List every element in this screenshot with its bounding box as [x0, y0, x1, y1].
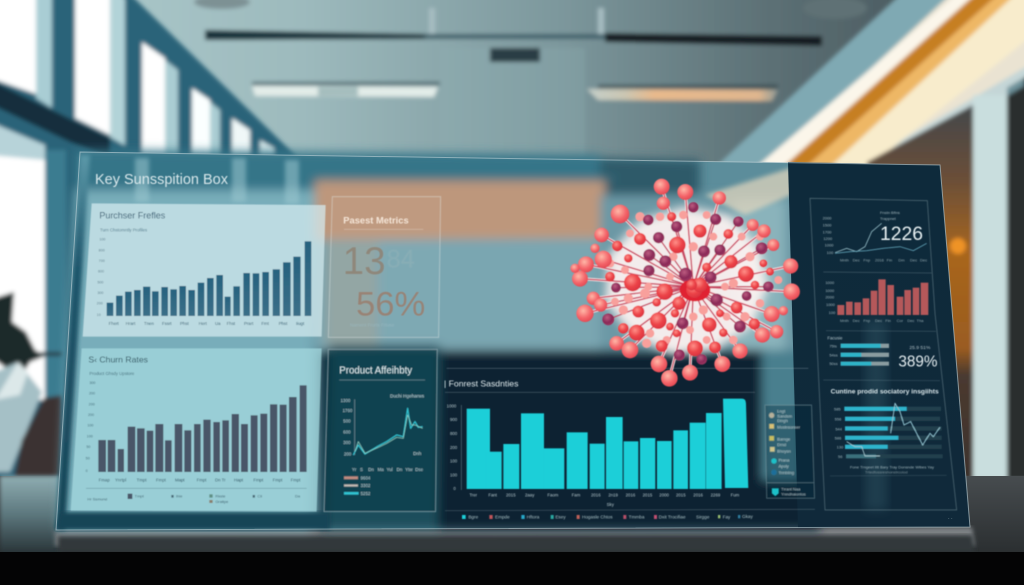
main title: Key Sunsspition Box	[95, 172, 229, 188]
chart legend: 3302	[361, 483, 371, 488]
x axis labels: Ytw	[405, 467, 413, 472]
metric: 56%: 56%	[356, 286, 425, 324]
y axis labels: 50	[86, 445, 90, 449]
mini chart: customer insights bars and line	[831, 389, 943, 474]
x axis labels: Sky	[607, 502, 615, 507]
mini chart: line with 1226: 1226	[880, 224, 923, 245]
x axis labels: Prart	[244, 321, 254, 326]
x axis labels: 2016	[693, 493, 704, 498]
x axis labels: 2015	[676, 493, 686, 498]
panel: product affinity line chart	[324, 349, 437, 512]
bottom legend: Empde	[495, 515, 510, 520]
y axis labels: 200	[89, 402, 95, 406]
metric: faint 84: 84	[387, 245, 415, 273]
x axis labels: Iiugt	[296, 321, 305, 326]
panel: right column of mini charts	[810, 198, 957, 510]
y axis labels: 600	[343, 429, 351, 434]
mini chart: progress bars with 389%: 54ss	[829, 352, 838, 357]
y axis labels	[447, 403, 458, 491]
mini chart: line with 1226: 1700	[823, 229, 832, 234]
left window wall	[0, 0, 300, 480]
bottom legend: Fay	[723, 515, 731, 520]
mini chart: red bars: Dec	[853, 318, 860, 323]
x axis labels: 2015	[506, 493, 516, 498]
mini chart: customer insights bars and line: 130	[837, 445, 844, 450]
y axis labels: 0	[453, 486, 456, 491]
mini chart: red bars: Tha	[917, 318, 924, 323]
y axis labels: 700	[99, 259, 105, 263]
right wall with light strip and doorway	[680, 0, 1024, 520]
line series	[353, 408, 423, 455]
inner purple spheres	[602, 202, 774, 365]
x axis labels: Phst	[279, 321, 288, 326]
x axis labels: Yul	[387, 467, 393, 472]
x axis labels: Fmpt	[253, 477, 264, 482]
x axis labels	[352, 467, 424, 472]
mini chart: line with 1226: 100	[827, 250, 834, 255]
bottom legend: Tmmba	[629, 515, 645, 520]
bottom legend	[462, 514, 754, 520]
bottom legend: Hftora	[527, 515, 540, 520]
panel: purchase profiles bar chart	[83, 203, 326, 337]
mini chart: progress bars with 389%: Facusie	[827, 335, 843, 340]
mini chart: progress bars with 389%: 75ts	[829, 344, 837, 349]
mini chart: customer insights bars and line: 556	[835, 417, 842, 422]
lower band	[56, 512, 330, 530]
mini chart: red bars: 1000	[825, 280, 835, 285]
x axis labels	[469, 493, 740, 507]
x axis labels: Dse	[415, 467, 424, 472]
bottom legend: Gkay	[742, 514, 754, 519]
mini chart: line with 1226: Fnstn Bflns	[880, 210, 900, 215]
y axis labels	[97, 238, 105, 317]
x axis labels: Ma	[378, 467, 384, 472]
x axis labels: Faom	[547, 493, 559, 498]
mini chart: red bars: 2000	[825, 295, 835, 300]
x axis labels: Frnt	[261, 321, 270, 326]
chart legend: 9604	[361, 475, 371, 480]
side legend box: Trrant Naa	[781, 487, 801, 492]
chart legend: Gratipe	[215, 499, 229, 504]
side legend box: Lngt	[777, 409, 786, 414]
x axis labels: 2n19	[608, 493, 619, 498]
y axis labels: 1000	[447, 403, 457, 408]
mini chart: customer insights bars and line: Trtedfossreshonstrcolod	[865, 469, 908, 474]
mini chart: line with 1226: Trappnet	[880, 216, 897, 221]
x axis labels: Hert	[199, 321, 208, 326]
x axis labels: Tmpt	[137, 477, 147, 482]
x axis labels: Trer	[469, 493, 478, 498]
molecule white core glow	[605, 207, 768, 355]
chart legend: Hr Ssmund	[87, 497, 107, 502]
mini chart: line with 1226: 1000	[825, 243, 834, 248]
chart legend: Rkste	[215, 493, 226, 498]
light columns behind glass	[135, 158, 299, 204]
side legend box: Ynndhaiontos	[781, 491, 806, 496]
mini chart: customer insights bars and line: 586	[835, 436, 842, 441]
x axis labels: 2000	[659, 493, 670, 498]
y axis labels: 300	[97, 291, 103, 295]
mini chart: line with 1226: Dm	[898, 257, 905, 262]
mini chart: red bars: Mnth	[840, 318, 849, 323]
y axis labels	[86, 381, 95, 473]
y axis labels: 500	[343, 419, 351, 424]
side legend box: Sandsm	[777, 413, 793, 418]
x axis labels: Hapt	[234, 477, 244, 482]
x axis labels: Mapt	[175, 477, 185, 482]
y axis labels: 300	[343, 440, 351, 445]
x axis labels: Dn Tr	[215, 477, 226, 482]
heading: forecast: | Fonrest Sasdnties	[444, 378, 519, 388]
subheading: Turn Chstomntly Profiles	[100, 227, 147, 232]
central red cluster	[680, 279, 710, 301]
metric: 13: 13	[343, 240, 386, 283]
bottom legend: Esey	[555, 515, 566, 520]
bars	[98, 385, 307, 472]
mini chart: red bars: 100	[829, 310, 836, 315]
x axis labels: Fmpt	[156, 477, 167, 482]
small pale spheres	[606, 211, 782, 348]
outer spheres	[570, 179, 800, 387]
molecule pale spokes	[580, 187, 792, 378]
x axis labels: Fhert	[109, 321, 120, 326]
bars	[107, 241, 311, 316]
side legend box: Apoly	[779, 463, 789, 468]
x axis labels: 2aay	[525, 493, 535, 498]
table surface	[0, 476, 1024, 585]
x axis labels: Fhst	[227, 321, 236, 326]
x axis labels	[109, 321, 305, 326]
glass dashboard panel	[56, 150, 970, 530]
icon: red molecule cluster	[570, 179, 800, 387]
x axis labels: Fssrt	[162, 321, 172, 326]
mini chart: customer insights bars and line: Fone Trngeet Iltt Bary Tray Donsnde Wibes Yay	[850, 465, 934, 470]
bottom legend: Bgre	[468, 515, 479, 520]
y axis labels: 200	[450, 445, 458, 450]
y axis labels: 100	[99, 238, 105, 242]
y axis labels: 900	[450, 417, 458, 422]
y axis labels: 1300	[341, 398, 351, 403]
y axis labels: 100	[87, 434, 93, 438]
y axis labels: 600	[98, 270, 104, 274]
x axis labels: Fmap	[99, 477, 110, 482]
mini chart: progress bars with 389%: 389%	[898, 353, 938, 370]
y axis labels: 200	[89, 392, 95, 396]
molecule red spokes	[580, 187, 792, 378]
y axis labels: 800	[99, 248, 105, 252]
mini chart: line with 1226: Dec	[853, 257, 860, 262]
mini chart: progress bars with 389%: 25.9 51%	[909, 345, 931, 351]
subheading: Product Ghsdy Upstore	[89, 371, 135, 376]
chart caption: Duchi Hgeharws	[390, 393, 425, 398]
mini chart: red bars: Fin	[885, 318, 891, 323]
heading: churn rates: S‹ Churn Rates	[88, 354, 149, 364]
x axis labels: Fum	[731, 493, 740, 498]
mini chart: line with 1226: 1500	[823, 223, 832, 228]
bottom legend: Hogasle Chtos	[582, 515, 613, 520]
bottom legend: Sirgge	[696, 515, 710, 520]
x axis labels: Hrart	[126, 321, 136, 326]
x axis labels: 2269	[711, 493, 721, 498]
mini chart: line with 1226: 2016	[875, 257, 885, 262]
x axis labels: 2015	[643, 493, 653, 498]
side legend box: Barnge	[777, 437, 791, 442]
x axis labels: Tnen	[144, 321, 154, 326]
mini chart: red bars: 1000	[825, 288, 835, 293]
side legend box: Prana	[779, 458, 790, 463]
x axis labels: Fant	[488, 493, 498, 498]
y axis labels: 800	[450, 431, 458, 436]
panel: churn rates bar chart	[71, 348, 322, 512]
inner red spheres	[605, 212, 774, 356]
x axis labels: 2016	[626, 493, 636, 498]
side legend box: Drnd	[777, 442, 786, 447]
left edge strip	[56, 155, 90, 530]
mini chart: customer insights bars and line: Cuntine prodid sociatory insgiihts	[831, 389, 939, 396]
mini chart: progress bars with 389%: 50ss	[829, 361, 838, 366]
chart legend: Dnh	[413, 451, 422, 456]
mini chart: red bars: 1000	[826, 302, 836, 307]
x axis labels: Fmpt	[197, 477, 207, 482]
panel: preset metrics	[328, 197, 441, 337]
x axis labels: Fam	[572, 493, 581, 498]
mini chart: line with 1226: 2000	[823, 215, 832, 220]
x axis labels: S	[360, 467, 363, 472]
mini chart: customer insights bars and line: 544	[835, 426, 843, 431]
mini chart: red bars: Dec	[907, 318, 914, 323]
side legend box: Dingh	[777, 418, 788, 423]
panel: forecast chart	[444, 368, 815, 520]
mini chart: line with 1226: Fin	[887, 257, 892, 262]
y axis labels: 50	[86, 456, 90, 460]
side legend box: Bhoysn	[777, 448, 791, 453]
corner page mark: · ·	[948, 516, 953, 522]
side legend box	[765, 405, 815, 498]
y axis labels: 100	[450, 473, 458, 478]
chart legend	[87, 493, 301, 504]
y axis labels: 200	[88, 413, 94, 417]
cream light band behind glass	[705, 165, 860, 215]
heading: purchase profiles: Purchser Frefles	[99, 210, 166, 220]
metric caption: Nament Frorts Frtuse	[350, 323, 395, 328]
y axis labels: 100	[87, 424, 93, 428]
y axis labels: 200	[97, 302, 103, 306]
x axis labels: Dn	[368, 467, 374, 472]
ceiling with lights	[0, 0, 1024, 210]
x axis labels: Phst	[180, 321, 189, 326]
bars	[467, 399, 748, 489]
y axis labels: 100	[450, 459, 458, 464]
chart legend: Ihle	[176, 494, 183, 499]
side legend box: Mostnsonser	[777, 424, 801, 429]
y axis labels: 0	[86, 469, 88, 473]
mini chart: red bars	[825, 279, 928, 323]
chart legend: Cli	[257, 494, 262, 499]
chart legend: 5252	[361, 491, 371, 496]
mini chart: progress bars with 389%	[827, 335, 938, 370]
x axis labels: 2016	[591, 493, 601, 498]
x axis labels: Fmpt	[291, 477, 301, 482]
mini chart: line with 1226	[823, 210, 927, 262]
side legend box: Trmbiing	[779, 470, 794, 475]
x axis labels: Yr	[352, 467, 357, 472]
mini chart: red bars: Cor	[897, 318, 904, 323]
y axis labels: 1760	[343, 408, 353, 413]
heading: metrics: Pasest Metrics	[343, 215, 409, 225]
chart legend: Tmpt	[135, 493, 145, 498]
y axis labels: 500	[97, 280, 103, 284]
mini chart: line with 1226: Dec	[910, 257, 917, 262]
glass backdrop reflections	[58, 150, 820, 530]
chart legend	[344, 451, 422, 496]
x axis labels: Ua	[215, 321, 221, 326]
mini chart: customer insights bars and line: 56	[838, 454, 843, 459]
bottom legend: Dxit Trocifiae	[659, 515, 686, 520]
chart legend: Da	[295, 493, 301, 498]
x axis labels: Ynrtpl	[115, 477, 126, 482]
x axis labels: Dn	[397, 467, 403, 472]
mini chart: customer insights bars and line: 585	[834, 407, 841, 412]
y axis labels: 10	[97, 313, 101, 317]
mini chart: line with 1226: Dec	[920, 257, 927, 262]
y axis labels: 300	[89, 381, 95, 385]
x axis labels: Fmpt	[273, 477, 283, 482]
mini chart: line with 1226: 1200	[823, 236, 833, 241]
y axis labels: 200	[344, 451, 352, 456]
mini chart: red bars: Dec	[875, 318, 882, 323]
x axis labels	[99, 477, 301, 482]
mini chart: red bars: Fnp	[863, 318, 871, 323]
mini chart: line with 1226: Fnp	[863, 257, 871, 262]
mini chart: line with 1226: Mnth	[840, 257, 849, 262]
y axis labels	[341, 398, 353, 456]
heading: product affinity: Product Affeihbty	[339, 365, 412, 376]
